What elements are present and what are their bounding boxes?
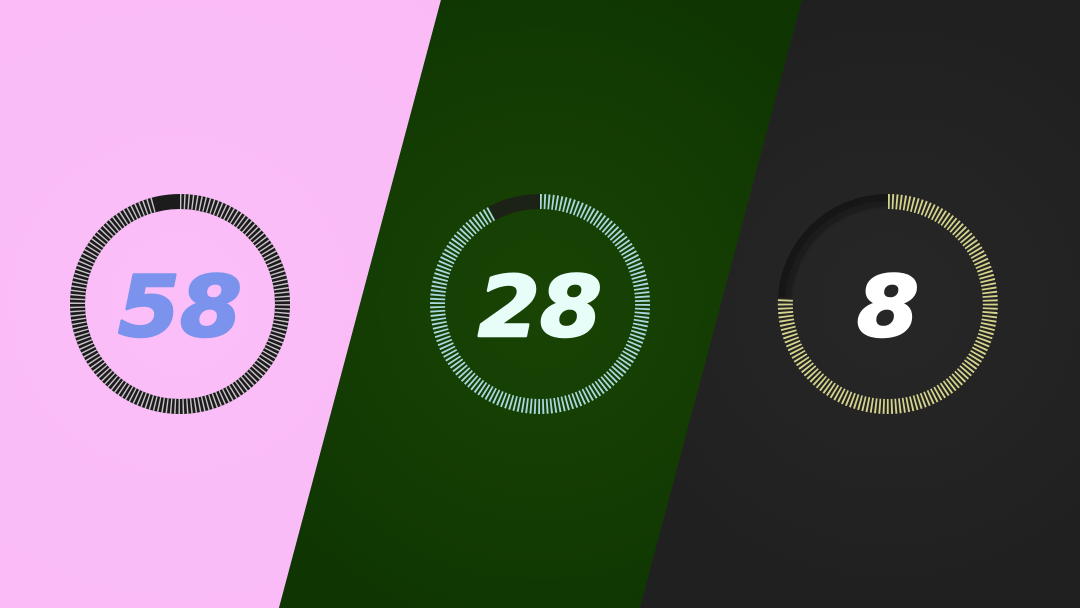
number: 8	[857, 259, 919, 356]
panel: pink background	[0, 0, 441, 608]
gauge: 28	[438, 202, 643, 406]
ring ticks	[438, 202, 643, 406]
ring track gap	[786, 201, 888, 298]
ring ticks	[77, 202, 282, 406]
number: 58	[118, 259, 242, 356]
gauge: 8	[785, 201, 990, 406]
panel: green background	[279, 0, 802, 608]
ring ticks	[785, 202, 990, 406]
number: 28	[478, 259, 602, 356]
ring track	[78, 202, 282, 406]
panel: dark background	[640, 0, 1080, 608]
ring track gap	[492, 202, 540, 214]
gauge: 58	[77, 202, 282, 406]
